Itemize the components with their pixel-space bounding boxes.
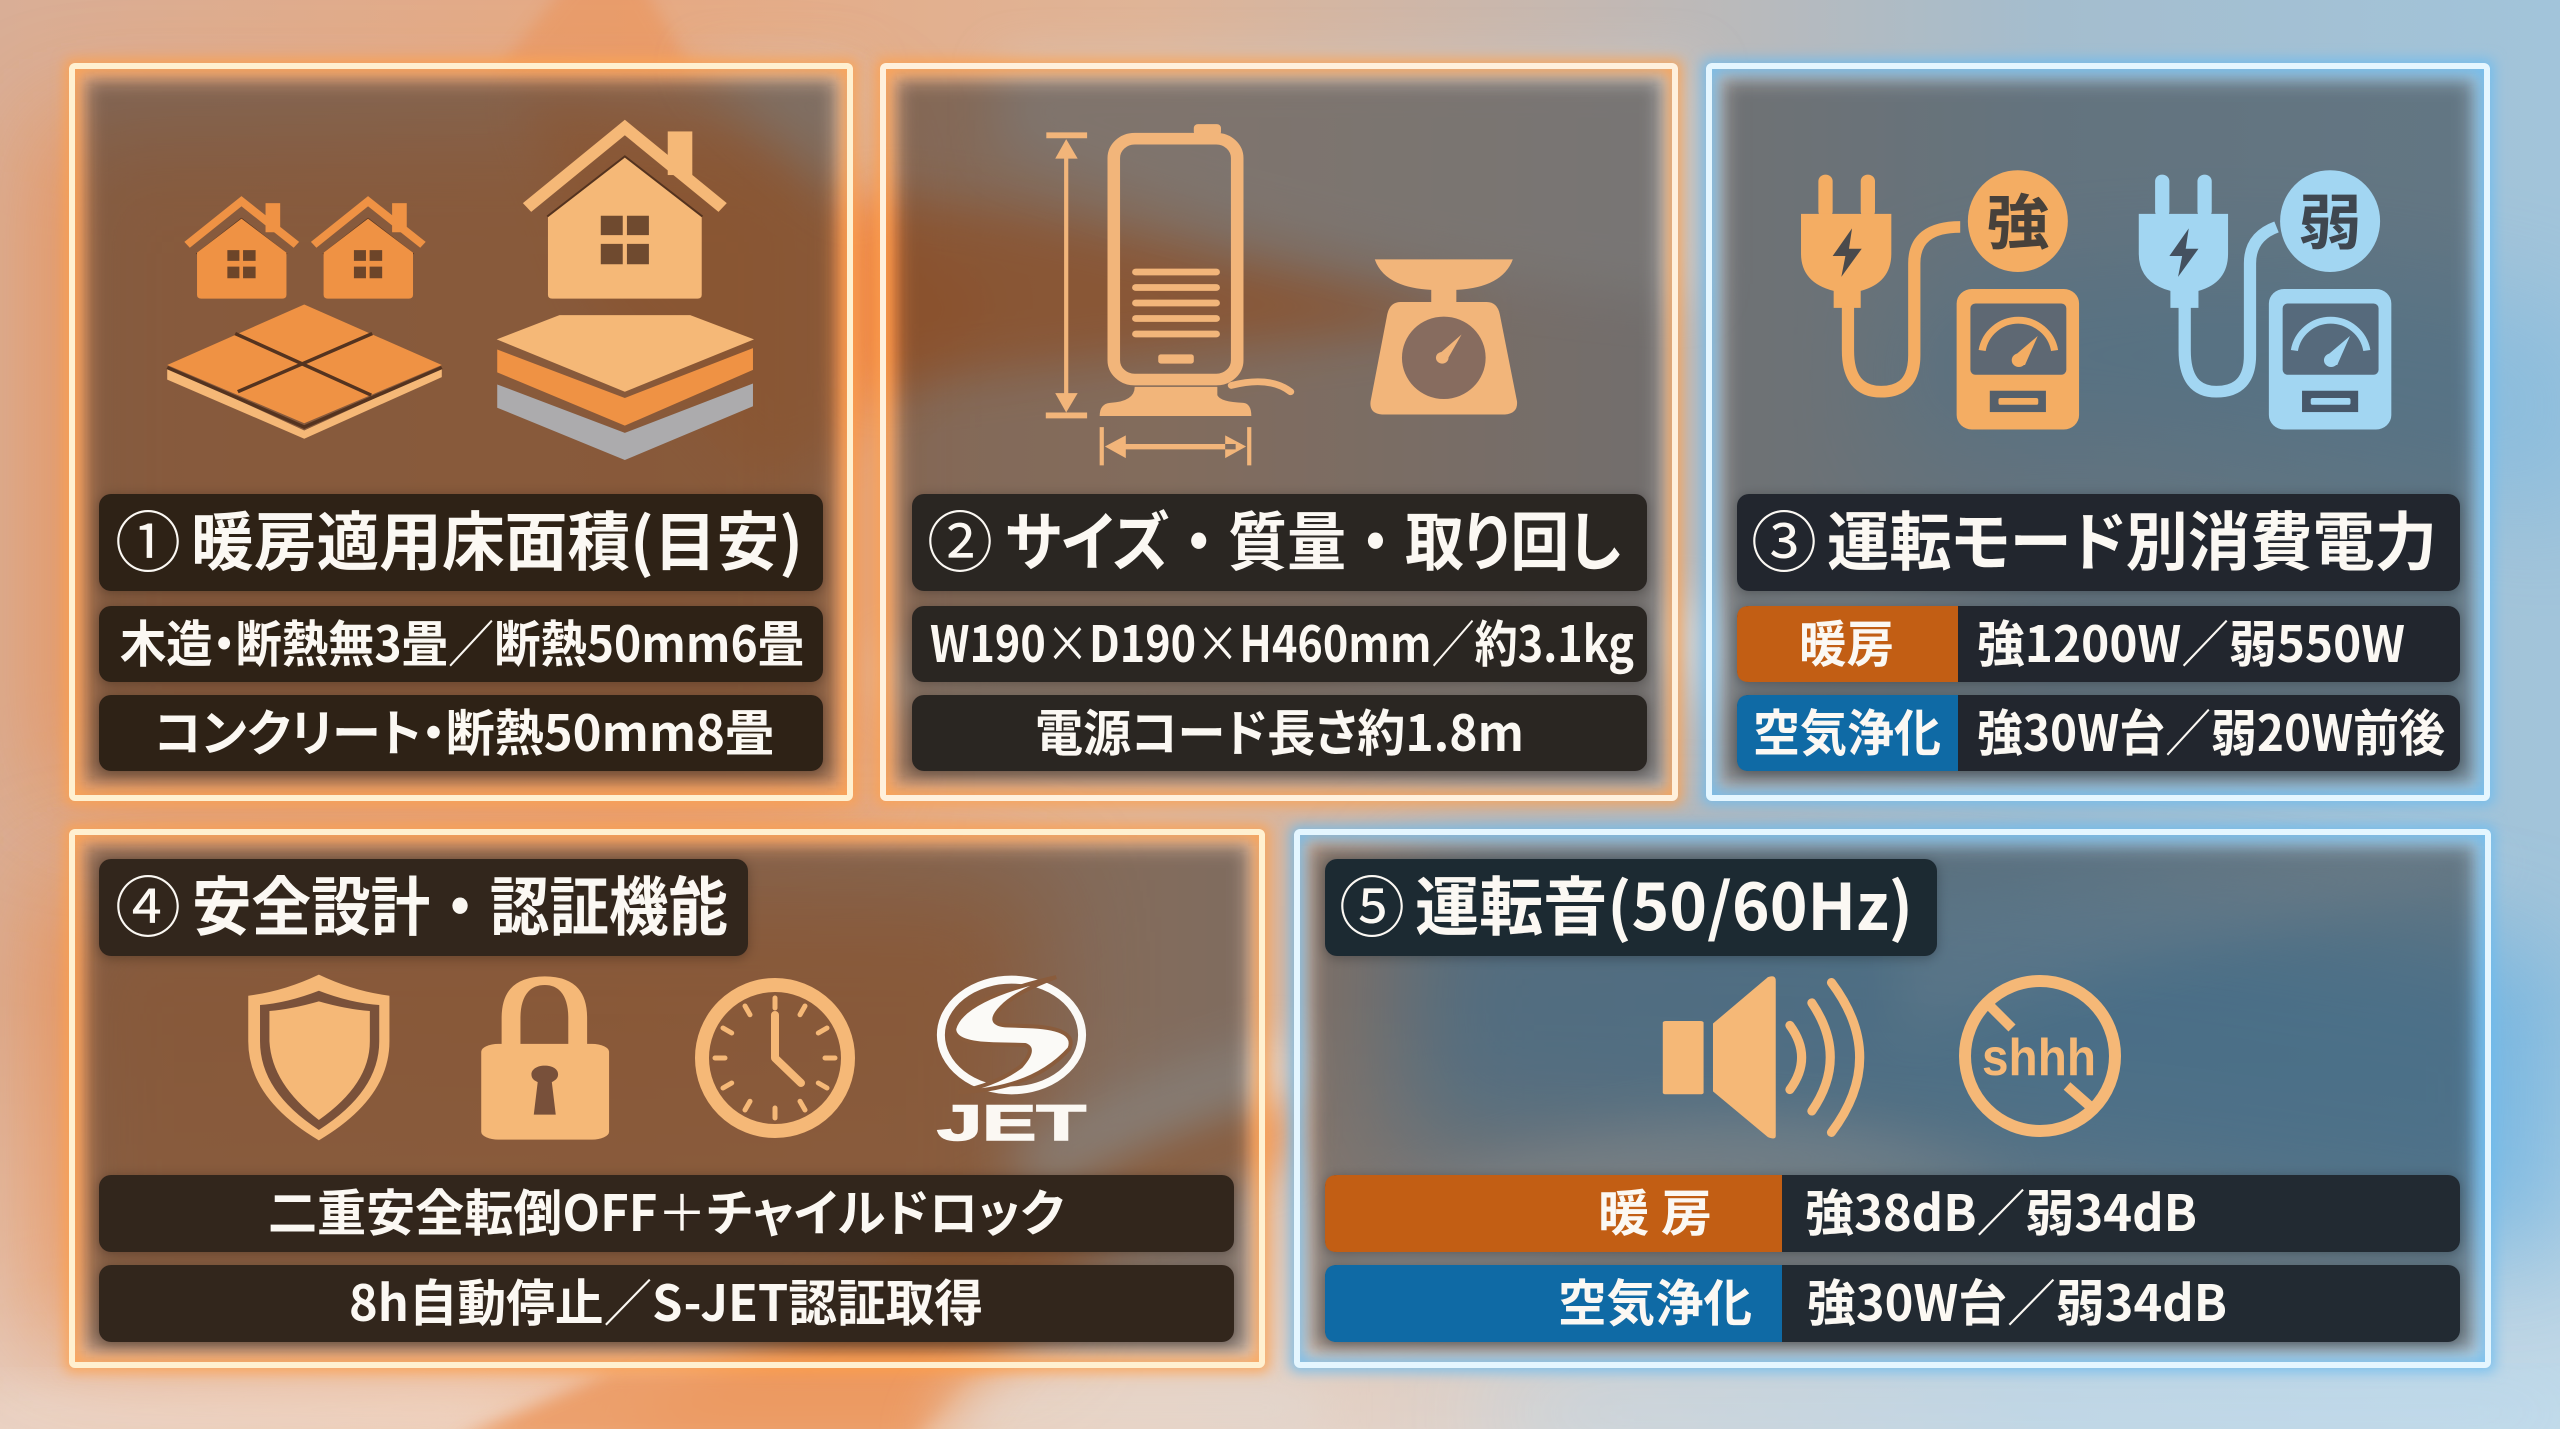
icon: plug and meter, strong [1801,170,2079,430]
heading: operating noise: 運転音(50/60Hz) [1415,857,1913,949]
icon: shield [248,975,389,1140]
heading: operating noise: ⑤ [1339,855,1405,951]
icon: S-JET mark: JET [937,1095,1086,1151]
heading: safety: ④ [115,855,181,951]
heading: safety: 安全設計・認証機能 [192,857,728,949]
heading: floor area: ① [115,490,181,586]
icon: small houses on tatami floor [167,201,442,439]
heading: power consumption: 運転モード別消費電力 [1827,492,2437,584]
heading: size and weight: ② [927,490,993,586]
heading: power consumption: ③ [1751,490,1817,586]
icon: speaker [1663,976,1860,1138]
panel: size and weight [883,66,1675,798]
table row: heating power [1737,605,2460,682]
icon: quiet sign [1965,981,2115,1131]
table row: air purifier power [1737,694,2460,771]
table row: air purifier power: 強30W台／弱20W前後 [1977,694,2445,766]
text row: wooden house: 木造・断熱無3畳／断熱50mm6畳 [120,605,804,677]
icon: padlock [481,981,609,1140]
icon: clock [702,985,848,1131]
panel: safety [72,832,1262,1365]
table row: heating power: 暖房 [1799,605,1894,677]
icon: plug and meter, strong: 強 [1986,174,2049,261]
text row: safety features [99,1174,1234,1252]
table row: air purifier noise [1325,1264,2460,1342]
heading: floor area: 暖房適用床面積(目安) [191,492,803,584]
icon: plug and meter, weak: 弱 [2298,174,2362,261]
table row: heating noise: 暖 房 [1598,1174,1712,1246]
table row: air purifier power: 空気浄化 [1753,694,1941,766]
text row: concrete house: コンクリート・断熱50mm8畳 [154,694,774,766]
icon: plug and meter, weak [2139,170,2391,430]
icon: heater with dimension arrows [1046,124,1291,465]
panel: operating noise [1297,832,2488,1365]
panel: floor area [72,66,850,798]
text row: cord length [912,694,1647,771]
text row: dimensions: W190×D190×H460mm／約3.1kg [930,605,1634,677]
table row: air purifier noise: 空気浄化 [1558,1264,1752,1336]
heading: size and weight: サイズ・質量・取り回し [1005,492,1621,584]
table row: air purifier noise: 強30W台／弱34dB [1807,1264,2227,1336]
table row: heating power: 強1200W／弱550W [1977,605,2405,677]
icon: weighing scale [1370,259,1517,414]
icon: quiet sign: shhh [1982,1029,2096,1087]
text row: auto stop and certification: 8h自動停止／S-JET認証取得 [349,1264,983,1336]
table row: heating noise: 強38dB／弱34dB [1805,1174,2197,1246]
text row: auto stop and certification [99,1264,1234,1342]
table row: heating noise [1325,1174,2460,1252]
icon: S-JET mark [937,977,1086,1151]
text row: safety features: 二重安全転倒OFF＋チャイルドロック [268,1174,1064,1246]
text row: cord length: 電源コード長さ約1.8m [1035,694,1524,766]
icon: large house on insulated floor layers [497,128,754,460]
panel: power consumption [1709,66,2487,798]
